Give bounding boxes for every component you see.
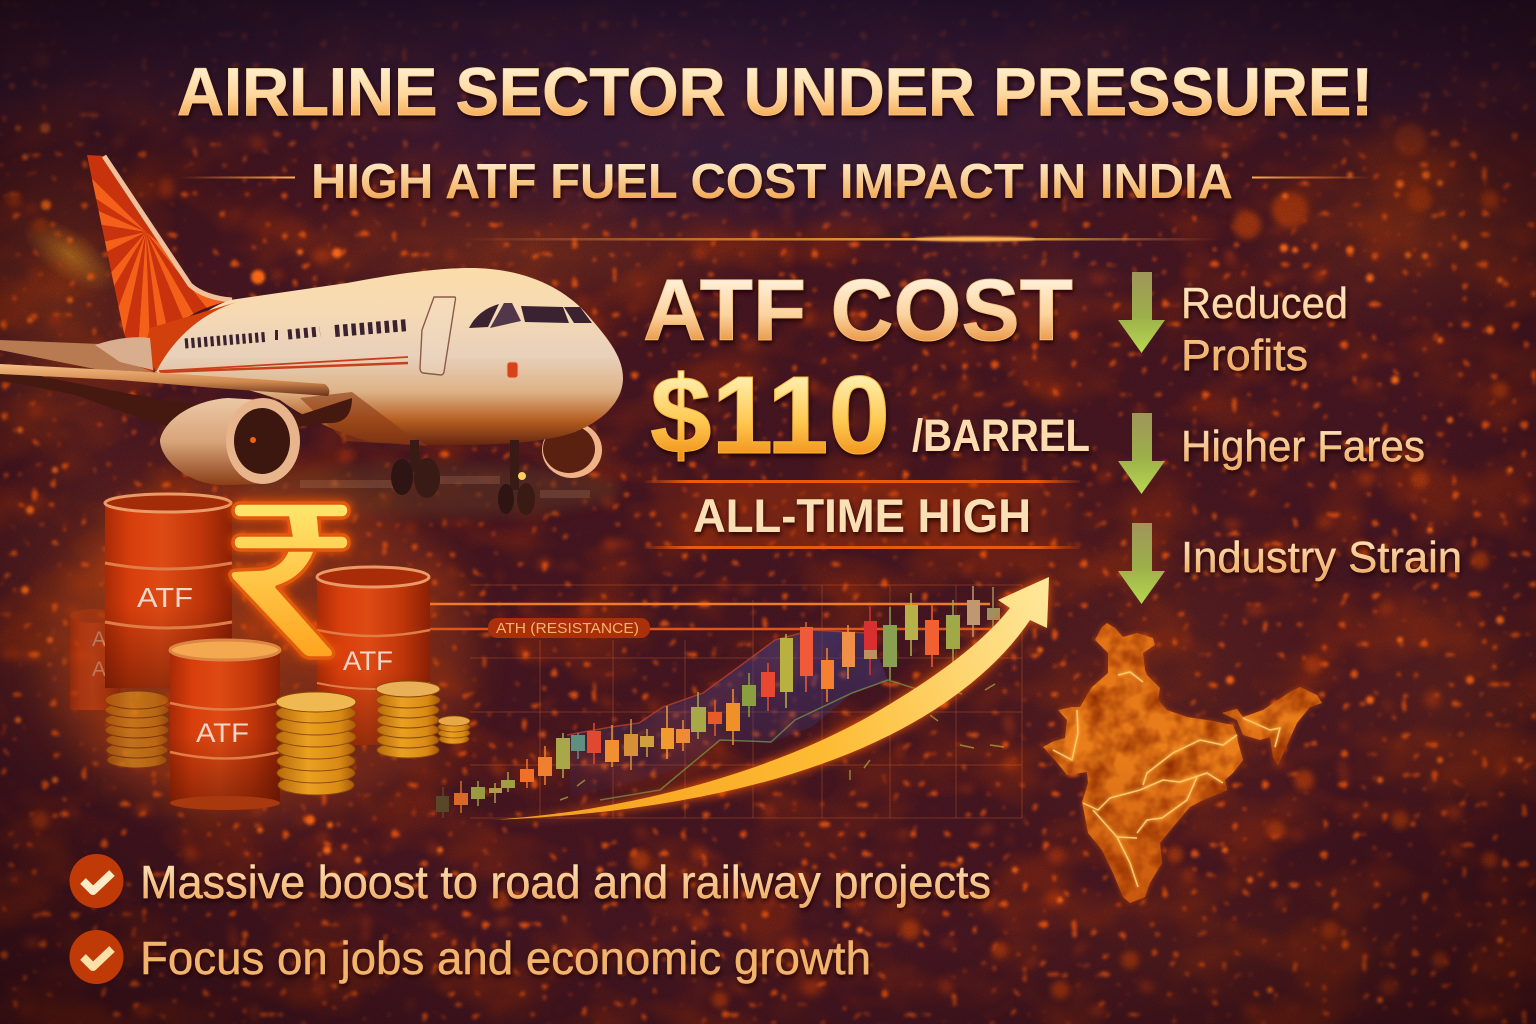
- ATH label: [488, 618, 650, 638]
- cheatlines: [159, 357, 408, 372]
- ATF cost heading: ATF COST: [643, 262, 1073, 359]
- rising arrow: [490, 577, 1049, 820]
- impact: higher fares: Higher Fares: [1181, 422, 1425, 471]
- cockpit windows: [469, 303, 592, 328]
- all-time high banner: [645, 480, 1080, 549]
- airport ground haze: [45, 464, 620, 820]
- back barrel: [70, 609, 120, 710]
- candlestick chart: [430, 585, 1022, 818]
- back barrel: A: [92, 628, 106, 651]
- back barrel: A: [92, 658, 106, 681]
- rear red swoosh: [145, 302, 237, 372]
- coin stack: center: [276, 692, 356, 795]
- sparkles: [560, 684, 1004, 800]
- barrel: front: ATF: [196, 718, 249, 748]
- icon: down arrow 1: [1118, 272, 1165, 353]
- divider: [460, 236, 1220, 242]
- barrel: right: ATF: [343, 646, 393, 676]
- bullet 2: Focus on jobs and economic growth: [140, 932, 871, 984]
- India map: [1043, 623, 1322, 903]
- chart grid: [470, 585, 1022, 818]
- barrel: right: [317, 567, 430, 745]
- bullet list: [70, 854, 991, 984]
- price: $110: [650, 354, 890, 477]
- ATH label: ATH (RESISTANCE): [496, 621, 639, 637]
- door: [420, 297, 456, 375]
- impact: reduced profits: Reduced: [1181, 279, 1348, 328]
- landing gear: [391, 440, 535, 515]
- price: [650, 354, 1090, 477]
- barrel: large back: ATF: [137, 582, 193, 613]
- resistance lines: [430, 604, 1000, 629]
- airplane: [0, 155, 623, 515]
- coin stack: left: [105, 691, 169, 768]
- belly fairing: [300, 392, 428, 446]
- bullet 1: Massive boost to road and railway projects: [140, 856, 991, 908]
- river lines: [1053, 672, 1280, 887]
- rupee symbol: [230, 503, 349, 658]
- tailplane: [0, 340, 153, 372]
- barrels and coins: [70, 494, 470, 810]
- subtitle: HIGH ATF FUEL COST IMPACT IN INDIA: [311, 155, 1233, 209]
- title: AIRLINE SECTOR UNDER PRESSURE!: [177, 54, 1373, 130]
- coin stack: small: [438, 716, 470, 744]
- price: /BARREL: [912, 410, 1090, 461]
- barrel: front: [170, 640, 280, 810]
- wing: [0, 364, 352, 435]
- nose light: [507, 362, 518, 378]
- coin stack: right: [376, 681, 440, 758]
- impact: industry strain: Industry Strain: [1181, 533, 1462, 582]
- windows: [185, 325, 409, 344]
- tail fin: [80, 155, 238, 372]
- impact: reduced profits: Profits: [1181, 331, 1308, 380]
- far engine: [542, 422, 602, 478]
- impact list: [1118, 272, 1462, 604]
- near engine: [160, 398, 300, 485]
- shaded area: [567, 630, 888, 797]
- icon: down arrow 2: [1118, 413, 1165, 494]
- moving average: [600, 680, 920, 800]
- icon: down arrow 3: [1118, 523, 1165, 604]
- fuselage: [155, 268, 623, 445]
- candles: [436, 586, 1000, 818]
- all-time high banner: ALL-TIME HIGH: [693, 489, 1031, 542]
- barrel: large back: [105, 494, 232, 688]
